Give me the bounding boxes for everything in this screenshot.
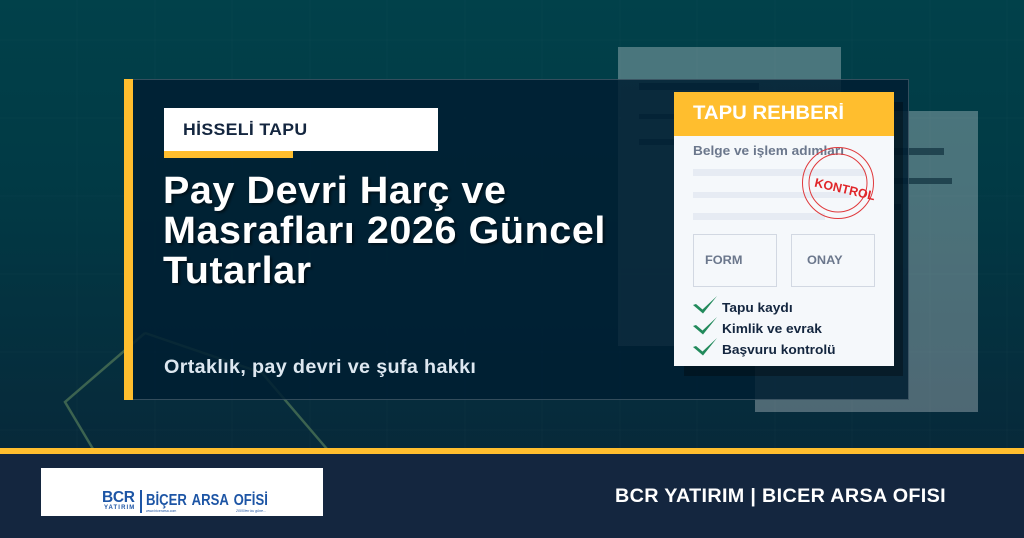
form label: FORM <box>705 253 742 267</box>
logo divider <box>140 490 142 513</box>
label underline <box>164 151 293 158</box>
placeholder line 3 <box>693 213 825 220</box>
guide card <box>674 92 894 366</box>
logo subtext: YATIRIM <box>104 505 135 511</box>
placeholder line 1 <box>693 169 866 176</box>
card subtitle: Belge ve işlem adımları <box>693 143 844 158</box>
ghost document back right <box>755 111 978 412</box>
item text: Başvuru kontrolü <box>722 342 836 357</box>
logo box <box>41 468 323 516</box>
logo slogan: 2005'ten bu güne... <box>236 509 266 513</box>
form box <box>693 234 777 287</box>
card title: TAPU REHBERİ <box>693 103 844 124</box>
title <box>163 170 606 292</box>
check item 1 <box>693 296 793 315</box>
icon: check <box>693 296 717 314</box>
category label <box>164 108 438 158</box>
icon: check <box>693 317 717 334</box>
subtitle: Ortaklık, pay devri ve şufa hakkı <box>164 357 476 378</box>
icon: check <box>693 338 717 356</box>
yellow divider <box>0 448 1024 454</box>
card header <box>674 92 894 136</box>
check item 2 <box>693 317 822 336</box>
logo mark: BCR <box>102 489 135 506</box>
label background <box>164 108 438 151</box>
check item 3 <box>693 338 836 357</box>
footer brand text: BCR YATIRIM | BICER ARSA OFISI <box>615 486 946 507</box>
item text: Kimlik ve evrak <box>722 321 822 336</box>
footer <box>0 454 1024 538</box>
title: Masrafları 2026 Güncel <box>163 210 606 252</box>
label text: HİSSELİ TAPU <box>183 120 307 139</box>
approval label: ONAY <box>807 253 843 267</box>
stamp: KONTROL <box>813 176 877 203</box>
main panel <box>124 79 909 400</box>
ghost document back left <box>618 47 841 346</box>
logo website: www.bicerarsa.com <box>146 509 176 513</box>
logo name: BİÇER ARSA OFİSİ <box>146 492 268 509</box>
yellow accent bar <box>124 79 133 400</box>
placeholder line 2 <box>693 192 851 198</box>
card shadow <box>684 102 903 376</box>
title: Pay Devri Harç ve <box>163 170 507 212</box>
stamp <box>802 147 877 219</box>
item text: Tapu kaydı <box>722 300 793 315</box>
title: Tutarlar <box>163 250 312 292</box>
approval box <box>791 234 875 287</box>
